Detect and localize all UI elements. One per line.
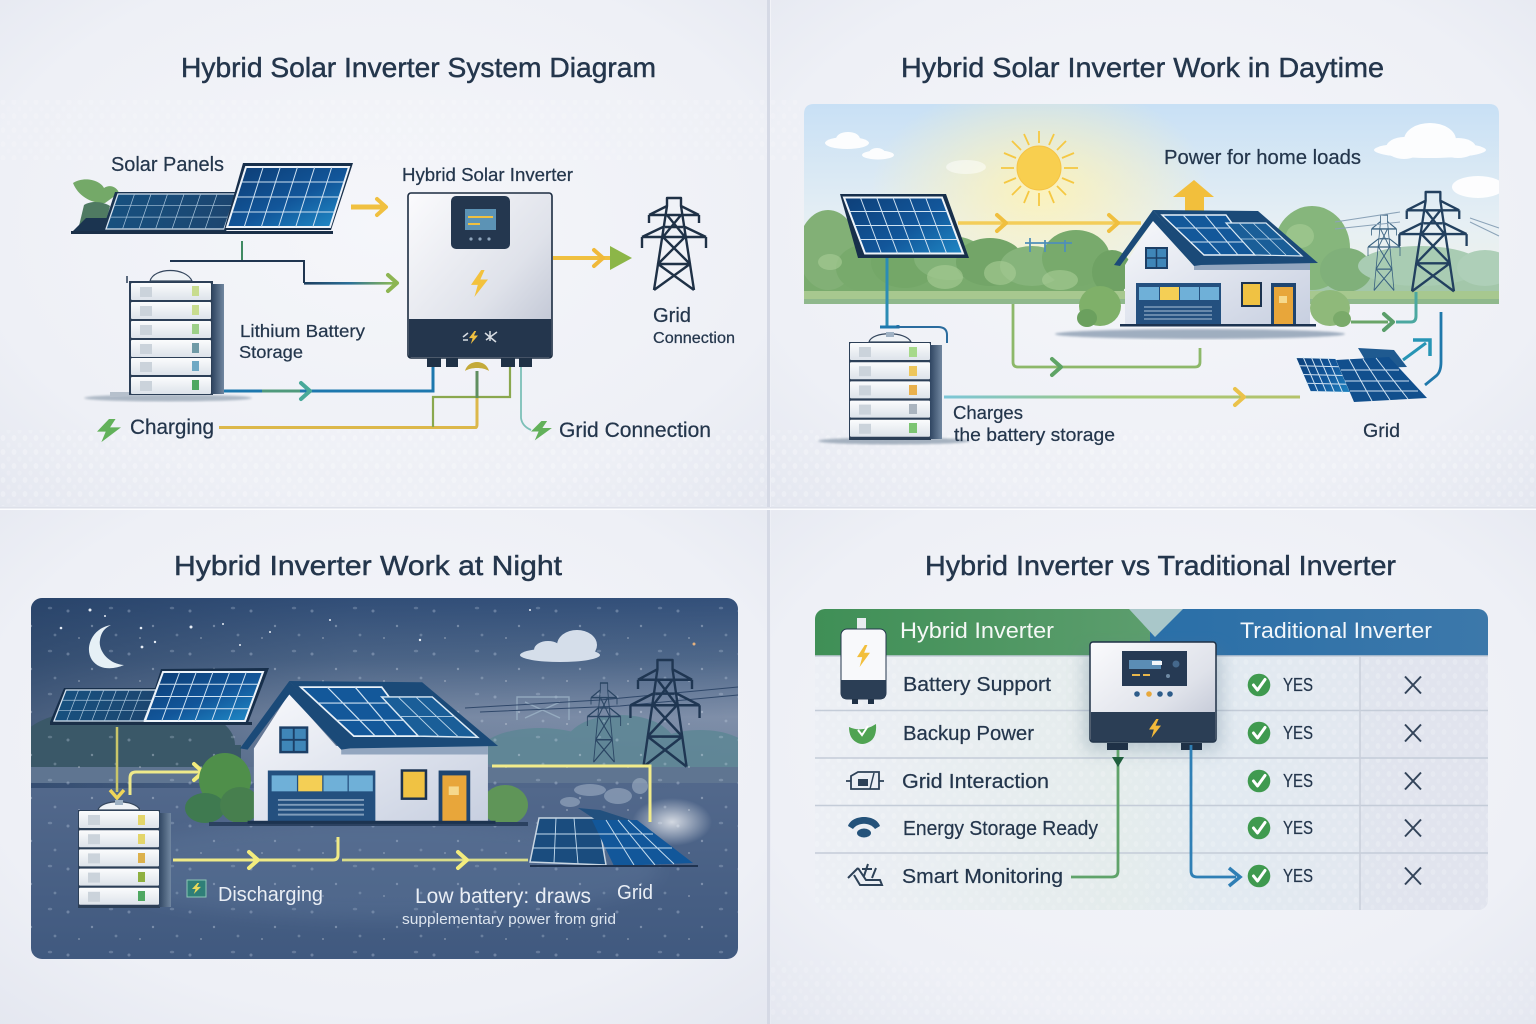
table (815, 609, 1488, 910)
label: charges the battery storage: the battery storage (954, 425, 1115, 445)
wire: grid connection (521, 367, 531, 430)
row: battery support: Battery Support (903, 674, 1051, 696)
wire: battery to inverter (224, 367, 433, 399)
arrow: solar to inverter (351, 199, 386, 215)
row: smart monitoring: Smart Monitoring (902, 866, 1063, 888)
night landscape (20, 598, 750, 959)
inverter unit (1085, 642, 1221, 750)
icon: moon (89, 625, 124, 668)
wire: solar to battery (110, 727, 225, 798)
label: discharging: Discharging (218, 884, 323, 906)
arrow: inverter to grid (553, 246, 632, 270)
solar panel (840, 194, 969, 258)
heading: night: Hybrid Inverter Work at Night (174, 550, 562, 581)
icon: cloud (520, 630, 600, 662)
row: backup power: YES (1283, 723, 1313, 743)
row: backup power (849, 722, 1421, 745)
wire: battery to grid (944, 389, 1300, 405)
icon: sun (1001, 131, 1078, 206)
wire: traditional (1191, 745, 1240, 886)
icon: discharging (187, 880, 206, 897)
row: smart monitoring: YES (1283, 866, 1313, 886)
icon: charging bolt (97, 419, 121, 442)
heading: comparison: Hybrid Inverter vs Traditional Inverter (925, 550, 1396, 581)
wire: grid to house (492, 766, 650, 822)
label: solar panels: Solar Panels (111, 154, 224, 176)
label: lithium battery storage: Storage (239, 342, 303, 362)
label: charges the battery storage (953, 403, 1115, 445)
label: traditional inverter: Traditional Inverter (1240, 618, 1432, 643)
wire: battery to panels (173, 837, 528, 868)
label: grid: Grid (617, 882, 653, 904)
row: grid interaction: YES (1283, 771, 1313, 791)
battery storage (84, 270, 252, 402)
label: grid: Grid (653, 305, 691, 327)
inverter unit (408, 193, 552, 367)
panel: daytime (798, 52, 1513, 445)
label: power for home loads: Power for home loads (1164, 147, 1361, 169)
label: supplementary power: supplementary power from grid (402, 911, 616, 928)
wire: charging (219, 362, 510, 428)
label: grid: Grid (1363, 421, 1400, 442)
label: charges the battery storage: Charges (953, 403, 1023, 423)
arrow: solar to house (958, 215, 1141, 231)
icon: grid tower (630, 198, 718, 291)
solar panel array (50, 668, 269, 725)
small solar panels (530, 808, 698, 866)
daytime landscape (804, 104, 1499, 304)
row: energy storage ready: Energy Storage Ready (903, 818, 1098, 840)
panel: comparison table (815, 550, 1488, 910)
wire: hybrid (1071, 750, 1124, 877)
row: battery support: YES (1283, 675, 1313, 695)
wire: house to grid (1351, 292, 1416, 330)
battery storage (39, 800, 220, 910)
label: connection: Connection (653, 330, 735, 347)
battery storage (818, 332, 970, 444)
label: hybrid inverter: Hybrid Inverter (900, 618, 1054, 643)
wire: solar to inverter (170, 241, 397, 291)
panel: night (20, 550, 750, 959)
icon: pylons (1335, 192, 1499, 291)
row: energy storage ready (848, 817, 1421, 840)
house (1055, 210, 1351, 339)
arrow: up to home loads (1173, 180, 1214, 211)
heading: system diagram: Hybrid Solar Inverter System Diagram (181, 52, 656, 83)
house (209, 681, 528, 826)
row: grid interaction: Grid Interaction (902, 771, 1049, 793)
label: hybrid solar inverter: Hybrid Solar Inverter (402, 165, 573, 185)
arrow: panels to grid (1403, 312, 1441, 385)
icon: leaf (73, 179, 119, 230)
wire: green loop (1013, 304, 1200, 375)
bushes (185, 753, 528, 825)
label: lithium battery storage (239, 321, 365, 362)
row: smart monitoring (848, 864, 1421, 888)
wire: solar to battery (880, 258, 947, 343)
small solar panels (1295, 348, 1443, 404)
label: grid connection: Grid Connection (559, 419, 711, 442)
icon: hybrid battery (841, 618, 886, 704)
label: charging: Charging (130, 416, 214, 439)
icon: pylons (587, 660, 700, 767)
panel: system diagram (71, 52, 735, 442)
solar panel array (71, 163, 355, 241)
icon: grid connection bolt (531, 421, 552, 440)
label: low battery: Low battery: draws (415, 885, 591, 908)
row: energy storage ready: YES (1283, 818, 1313, 838)
heading: daytime: Hybrid Solar Inverter Work in Daytime (901, 52, 1384, 83)
row: grid interaction (846, 770, 1421, 793)
label: lithium battery storage: Lithium Battery (240, 321, 365, 341)
row: backup power: Backup Power (903, 723, 1034, 745)
row: battery support (903, 674, 1421, 696)
